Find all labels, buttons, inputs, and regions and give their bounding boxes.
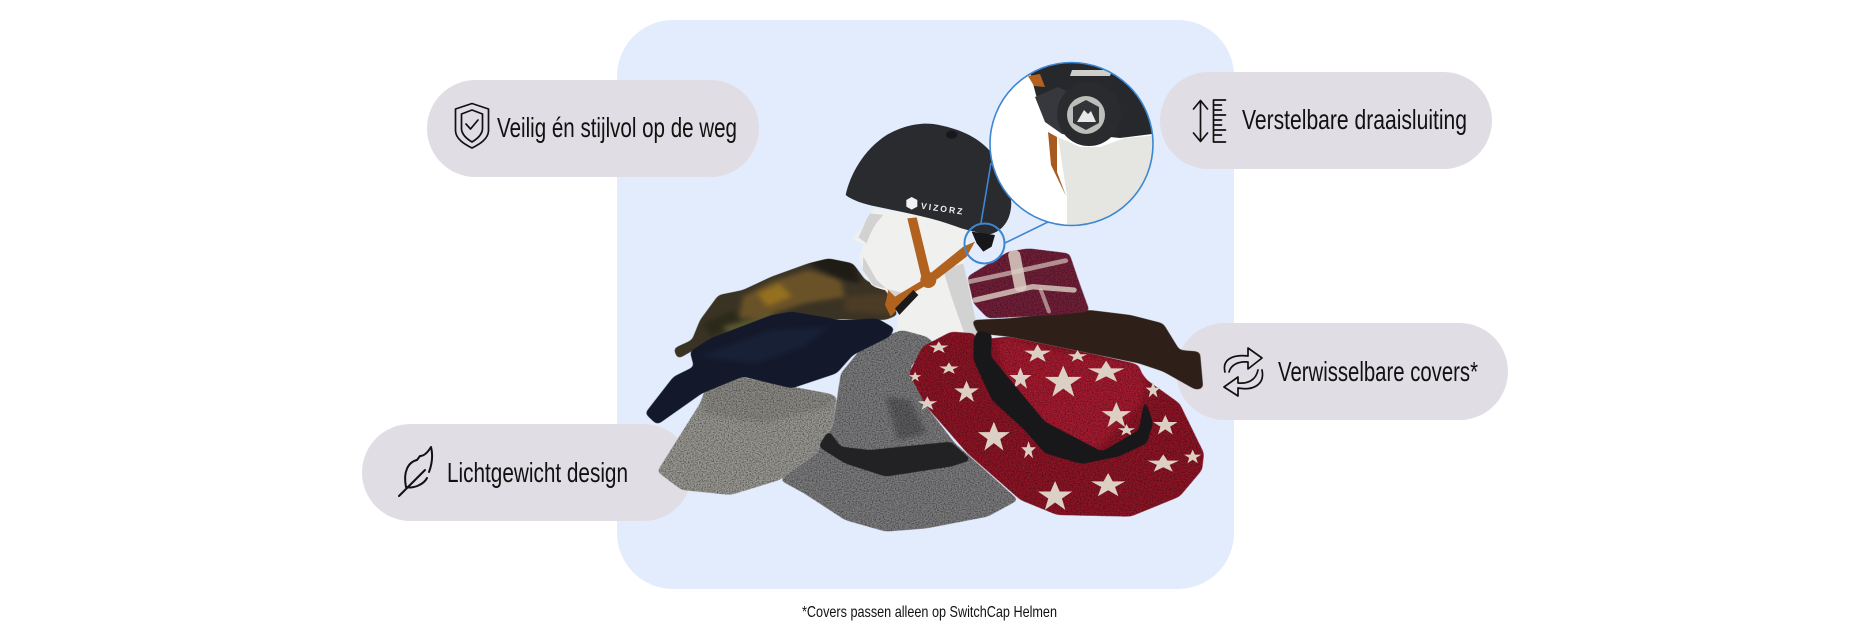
footnote: *Covers passen alleen op SwitchCap Helmen	[802, 604, 1057, 621]
cover: grey herringbone	[657, 377, 837, 495]
mannequin head	[852, 208, 980, 340]
icon: adjustable size ruler	[1194, 100, 1226, 142]
infographic canvas	[362, 20, 1508, 620]
red cover fabric	[909, 332, 1204, 517]
pile of interchangeable covers	[645, 248, 1204, 532]
label: veilig en stijlvol: Veilig én stijlvol op de weg	[497, 112, 737, 143]
label: verstelbare draaisluiting: Verstelbare draaisluiting	[1242, 104, 1467, 135]
cover: brown	[971, 310, 1203, 390]
cover: red with stars	[909, 330, 1204, 517]
camo cover behind head	[673, 258, 898, 359]
icon: feather	[399, 447, 432, 496]
label: lichtgewicht design: Lichtgewicht design	[447, 457, 628, 488]
callout: lichtgewicht design	[362, 424, 692, 521]
strap buckle	[895, 290, 918, 315]
cover: navy	[645, 312, 895, 425]
label: verwisselbare covers: Verwisselbare covers*	[1278, 356, 1478, 387]
cover: grey fleece	[780, 330, 1018, 532]
rotary dial on helmet	[972, 232, 995, 252]
chin strap	[885, 217, 975, 317]
cover: plaid	[967, 248, 1090, 318]
small focus circle	[964, 224, 1004, 264]
magnifier ring	[990, 62, 1153, 226]
helmet on mannequin head	[846, 124, 1011, 340]
helmet logo	[906, 197, 965, 217]
zoomed dial detail	[990, 63, 1152, 225]
head shading	[858, 213, 980, 340]
red cover band	[973, 330, 1153, 464]
icon: swap arrows	[1224, 348, 1262, 396]
magnifier connector lines	[981, 163, 1048, 243]
helmet logo: VIZORZ	[920, 201, 965, 217]
magnifier callout	[964, 55, 1160, 264]
callout: verstelbare draaisluiting	[1160, 72, 1492, 169]
background panel	[617, 20, 1234, 589]
plaid stripes	[969, 255, 1073, 312]
icon: shield	[456, 104, 488, 148]
callout: veilig en stijlvol	[427, 80, 759, 177]
fleece cover band	[818, 430, 971, 477]
callout: verwisselbare covers	[1176, 323, 1508, 420]
helmet shell	[846, 124, 1011, 235]
